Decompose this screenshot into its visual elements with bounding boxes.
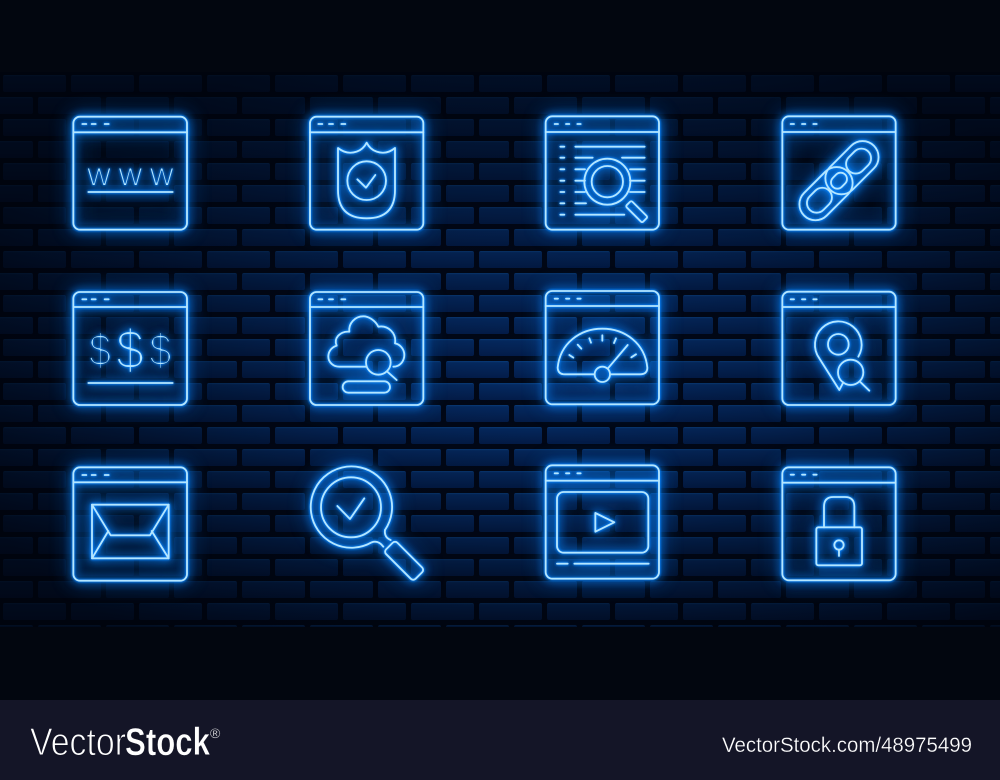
icon: shield browser window <box>310 117 423 230</box>
icon: dollar browser window <box>73 292 187 405</box>
icon: cloud search browser window <box>310 292 423 405</box>
icon: speedometer browser window <box>546 291 659 404</box>
progress bar <box>557 561 649 566</box>
chain <box>793 134 885 227</box>
icon: envelope browser window <box>73 467 187 581</box>
map pin <box>815 321 862 390</box>
shield with check <box>338 143 395 218</box>
image id: VectorStock.com/48975499 <box>722 734 972 757</box>
icon: video player browser window <box>546 465 659 579</box>
icon: location search browser window <box>782 292 896 405</box>
logo: ® <box>210 725 221 741</box>
icon: www browser window <box>73 117 187 230</box>
icon: magnifier with check <box>311 466 425 581</box>
video screen <box>557 492 648 553</box>
dollar signs: $ <box>149 325 172 376</box>
check mark <box>337 498 364 519</box>
underline <box>88 380 173 386</box>
window frame <box>310 292 423 405</box>
underline <box>88 189 173 195</box>
window frame <box>73 467 187 581</box>
dollar signs: $ <box>89 325 111 376</box>
window frame <box>546 465 659 579</box>
window frame <box>73 292 187 405</box>
gauge <box>558 329 647 382</box>
magnifier <box>584 159 648 223</box>
window frame <box>782 467 896 580</box>
envelope <box>92 505 169 558</box>
icon: chain link browser window <box>782 116 896 230</box>
padlock <box>816 497 862 565</box>
window frame <box>546 116 659 230</box>
window frame <box>782 292 896 405</box>
play triangle <box>595 513 614 532</box>
window frame <box>782 116 896 230</box>
www text: WWW <box>87 163 174 191</box>
window frame <box>310 117 423 230</box>
brick wall <box>0 72 1000 627</box>
logo <box>30 721 221 764</box>
cloud <box>328 316 404 367</box>
icon: padlock browser window <box>782 467 896 580</box>
window frame <box>73 117 187 230</box>
dollar signs <box>89 320 172 382</box>
window frame <box>546 291 659 404</box>
magnifier <box>838 360 869 391</box>
footer bar <box>0 700 1000 780</box>
icon: document search browser window <box>546 116 659 230</box>
text lines <box>560 147 645 215</box>
handle <box>384 530 425 581</box>
logo: Vector <box>30 721 126 764</box>
dollar signs: $ <box>116 320 144 382</box>
logo: Stock <box>125 721 210 764</box>
lens <box>311 466 392 548</box>
pill bar <box>343 381 390 393</box>
magnifier <box>366 350 397 380</box>
